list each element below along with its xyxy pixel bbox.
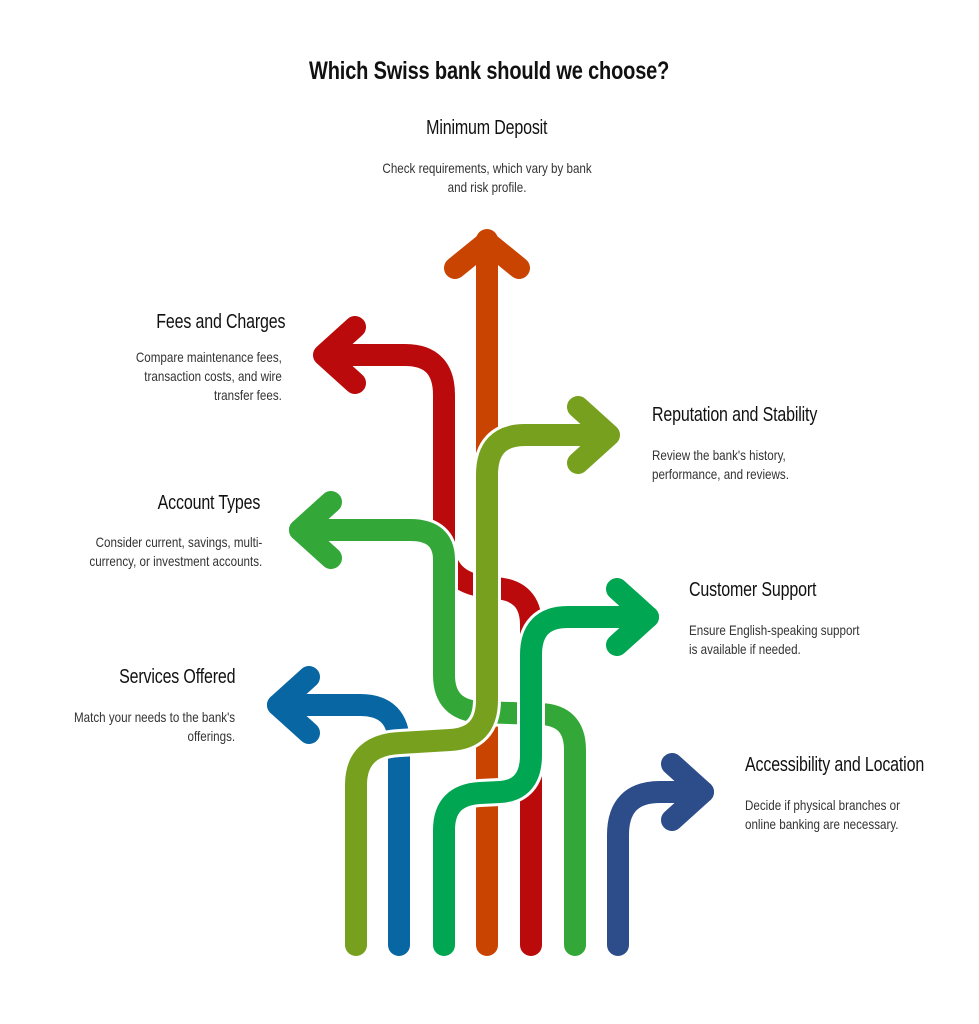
text: account types xyxy=(89,534,262,569)
text: fees: transfer fees. xyxy=(214,387,282,403)
text: minimum deposit: and risk profile. xyxy=(448,179,526,195)
text: fees: transaction costs, and wire xyxy=(144,368,282,384)
heading: account types: Account Types xyxy=(157,492,260,514)
heading: reputation: Reputation and Stability xyxy=(652,404,817,426)
text: reputation xyxy=(652,447,789,482)
text: account types: Consider current, savings, multi- xyxy=(95,534,262,550)
text: customer support: is available if needed. xyxy=(689,641,801,657)
text: account types: currency, or investment accounts. xyxy=(89,553,262,569)
text: customer support: Ensure English-speaking support xyxy=(689,622,860,638)
text: services xyxy=(74,709,235,744)
heading: minimum deposit: Minimum Deposit xyxy=(426,117,548,139)
text: services: offerings. xyxy=(187,728,235,744)
heading: customer support: Customer Support xyxy=(689,579,816,601)
text: customer support xyxy=(689,622,860,657)
text: fees xyxy=(136,349,282,403)
text: minimum deposit: Check requirements, which vary by bank xyxy=(382,160,592,176)
arrow: services (blue) xyxy=(278,677,399,945)
arrow: account types (green) xyxy=(300,502,575,945)
text: minimum deposit xyxy=(382,160,592,195)
arrow: customer support (green) xyxy=(444,589,648,945)
arrow: fees (red) xyxy=(324,327,531,945)
text: reputation: Review the bank's history, xyxy=(652,447,786,463)
text: accessibility: Decide if physical branches or xyxy=(745,797,900,813)
arrow: reputation (olive) xyxy=(356,407,609,945)
text: reputation: performance, and reviews. xyxy=(652,466,789,482)
heading: accessibility: Accessibility and Location xyxy=(745,754,924,776)
arrow: minimum deposit (orange) xyxy=(455,240,519,945)
arrow: accessibility (navy) xyxy=(618,764,703,945)
title: Which Swiss bank should we choose? xyxy=(309,57,670,85)
text: services: Match your needs to the bank's xyxy=(74,709,235,725)
text: accessibility xyxy=(745,797,900,832)
text: fees: Compare maintenance fees, xyxy=(136,349,282,365)
heading: services: Services Offered xyxy=(119,666,235,688)
text: accessibility: online banking are necessary. xyxy=(745,816,899,832)
heading: fees: Fees and Charges xyxy=(156,311,285,333)
